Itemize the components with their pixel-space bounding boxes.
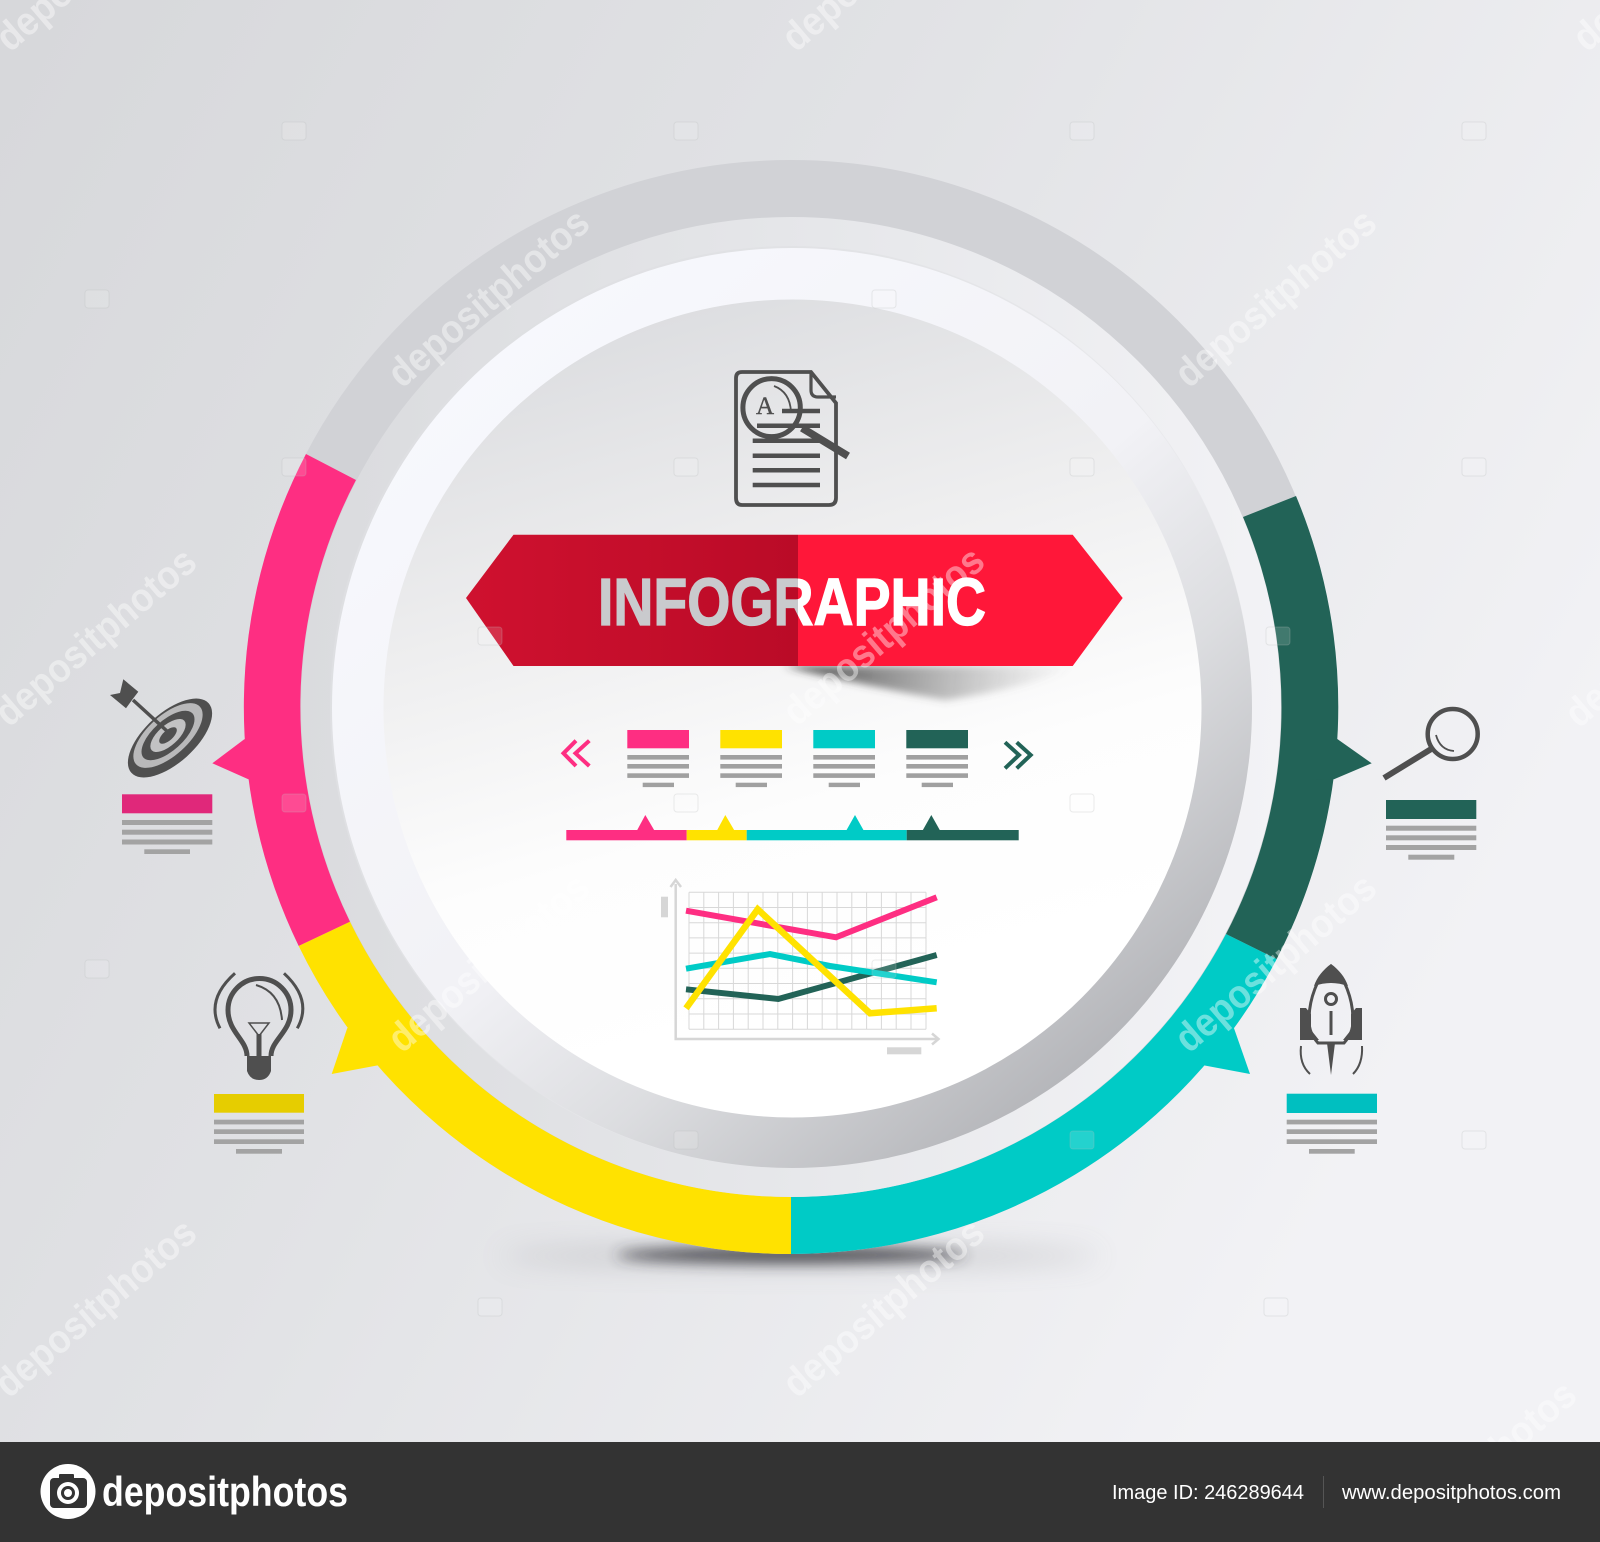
icon: magnifier	[1384, 709, 1478, 778]
segment: yellow	[299, 922, 791, 1254]
legend: yellow	[720, 730, 782, 787]
watermark: depositphotos	[774, 538, 993, 734]
chart axes	[670, 880, 938, 1044]
footer bar	[0, 1442, 1600, 1542]
text block: yellow	[214, 1094, 304, 1154]
watermark: depositphotos	[1166, 200, 1385, 396]
series: yellow	[686, 909, 937, 1013]
icon: left chevrons	[564, 741, 589, 766]
text block: teal	[1287, 1094, 1377, 1154]
ground shadow	[500, 1247, 1100, 1265]
pointer: dark green	[1310, 739, 1372, 779]
footer logo icon	[40, 1464, 96, 1519]
footer logo wordmark: depositphotos	[102, 1468, 348, 1515]
pale band	[316, 232, 1266, 1182]
series: teal	[686, 954, 937, 982]
footer url: www.depositphotos.com	[1341, 1482, 1561, 1504]
icon: right chevrons	[1005, 742, 1031, 768]
outer grey ring	[273, 189, 1309, 1225]
text block: dark green	[1386, 800, 1476, 860]
segment: teal	[791, 934, 1277, 1254]
watermark cameras	[85, 122, 1486, 1316]
text block: pink	[122, 794, 212, 854]
line chart	[661, 880, 938, 1054]
footer image id: Image ID: 246289644	[1112, 1482, 1304, 1504]
icon: rocket	[1300, 964, 1362, 1075]
chart grid	[689, 892, 926, 1029]
title: INFOGRAPHIC	[598, 565, 986, 640]
watermark: depositphotos	[1166, 865, 1385, 1061]
icon: target with arrow	[110, 679, 225, 791]
icon: light bulb	[215, 973, 303, 1080]
panel: concentric circle	[316, 232, 1266, 1182]
icon: document with magnifier	[736, 372, 848, 505]
bevel ring	[332, 248, 1252, 1168]
title banner	[466, 535, 1123, 666]
series: dark green	[686, 955, 937, 999]
ribbon shadow	[784, 666, 1078, 700]
pointer: teal	[1197, 1028, 1250, 1074]
inner disc	[384, 300, 1202, 1118]
legend: dark green	[906, 730, 968, 787]
icon: document with magnifier: A	[756, 393, 774, 420]
watermark: depositphotos	[379, 865, 598, 1061]
legend: teal	[813, 730, 875, 787]
legend: pink	[627, 730, 689, 787]
watermark: depositphotos	[774, 1210, 993, 1406]
series: pink	[686, 897, 937, 937]
segment: dark green	[1226, 496, 1372, 959]
pointer: yellow	[332, 1028, 385, 1074]
timeline bar	[566, 815, 1019, 840]
pointer: pink	[212, 739, 270, 779]
watermark: depositphotos	[379, 200, 598, 396]
segment: pink	[212, 454, 356, 946]
